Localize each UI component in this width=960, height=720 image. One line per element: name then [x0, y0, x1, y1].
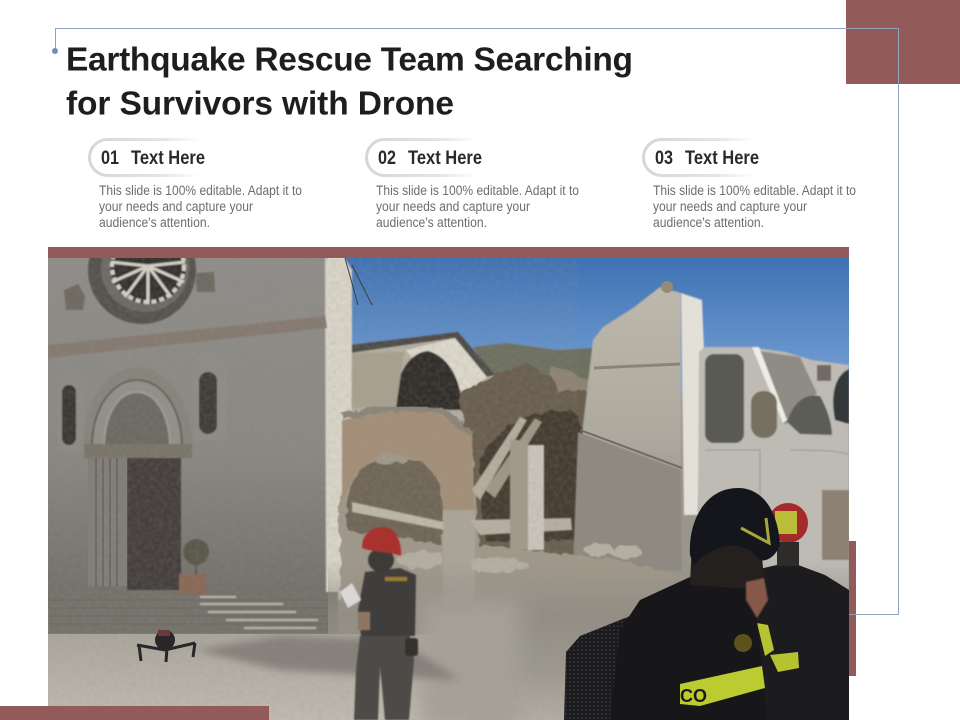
jacket — [610, 577, 767, 720]
shoulder badge — [734, 634, 752, 652]
rear body — [755, 562, 849, 720]
helmet yellow patch — [775, 511, 797, 534]
rose window — [87, 258, 197, 324]
jacket lettering: CO — [680, 686, 707, 706]
tablet — [340, 583, 361, 608]
house with roof behind the ruins — [350, 332, 500, 420]
item 01 — [90, 140, 302, 230]
right niche — [198, 372, 218, 434]
photo scene: rescue team flying a drone at earthquake ruins — [48, 216, 849, 720]
tower face — [582, 286, 682, 469]
portal columns — [88, 458, 127, 586]
black helmet — [690, 488, 780, 566]
drone body — [155, 630, 175, 650]
portal door — [127, 458, 181, 590]
arm — [358, 612, 370, 630]
ground — [48, 634, 424, 720]
helmet highlights — [741, 518, 769, 543]
reflective stripes — [757, 623, 774, 656]
broken tower — [573, 281, 704, 570]
radio pouch — [405, 638, 418, 656]
description 01: your needs and capture your — [99, 199, 253, 214]
heading 01: Text Here — [131, 148, 205, 169]
tower white edge — [681, 293, 704, 515]
description 03: This slide is 100% editable. Adapt it to — [653, 183, 856, 198]
description 03: audience's attention. — [653, 215, 764, 230]
stone pillar — [442, 510, 476, 588]
potted plant — [179, 539, 209, 594]
heading 01: 01 — [101, 148, 119, 169]
ground shadow — [195, 636, 460, 680]
description 02: This slide is 100% editable. Adapt it to — [376, 183, 579, 198]
heading 03: 03 — [655, 148, 673, 169]
base tone behind scene — [48, 393, 849, 652]
dust haze over base of ruins — [328, 560, 849, 720]
hand — [746, 578, 768, 618]
description 01 — [99, 183, 302, 230]
decorative block: top right — [846, 0, 960, 84]
description 02 — [376, 183, 579, 230]
corner pier — [325, 258, 352, 600]
item 03 — [644, 140, 856, 230]
white truck cab — [698, 347, 849, 600]
pill outline 02 — [366, 140, 477, 176]
description 02: your needs and capture your — [376, 199, 530, 214]
photo grain texture — [63, 258, 578, 589]
frame dot — [52, 48, 58, 54]
title — [66, 42, 633, 122]
head — [368, 548, 394, 572]
shirt — [358, 568, 416, 636]
heading 02: Text Here — [408, 148, 482, 169]
title: Earthquake Rescue Team Searching — [66, 42, 633, 78]
cornice band — [48, 316, 327, 358]
rear helmet — [768, 503, 808, 543]
beams — [352, 417, 572, 550]
reflective stripe — [680, 666, 765, 706]
collapsed arch, dark brown — [460, 362, 590, 560]
rubble heap — [337, 450, 664, 600]
pill outline 03 — [644, 140, 754, 176]
decorative block: bottom left — [0, 706, 269, 720]
steps — [48, 592, 338, 634]
pill outline 01 — [90, 140, 200, 176]
left niche — [62, 384, 76, 446]
church wall — [48, 258, 328, 608]
rubble and broken arch in centre — [337, 406, 664, 600]
description 02: audience's attention. — [376, 215, 487, 230]
neck — [690, 535, 765, 590]
sky — [345, 258, 849, 393]
mountain — [472, 342, 592, 380]
hole beneath arch — [346, 460, 443, 545]
rear neck — [777, 542, 799, 566]
heading 02: 02 — [378, 148, 396, 169]
band above photo — [48, 247, 849, 258]
trousers — [354, 636, 414, 720]
thin frame outline — [56, 28, 898, 614]
red helmet — [362, 527, 401, 556]
backpack mesh — [564, 612, 660, 720]
rear firefighter — [755, 503, 849, 720]
drone — [137, 630, 195, 662]
shirt logo — [385, 577, 407, 581]
firefighter with tablet — [340, 527, 418, 720]
small carved emblems — [64, 272, 215, 310]
title: for Survivors with Drone — [66, 86, 454, 122]
description 01: audience's attention. — [99, 215, 210, 230]
tan arch — [342, 410, 474, 510]
heading 03: Text Here — [685, 148, 759, 169]
description 01: This slide is 100% editable. Adapt it to — [99, 183, 302, 198]
description 03 — [653, 183, 856, 230]
decorative block: right of photo — [849, 541, 856, 676]
portal arch — [83, 367, 192, 458]
tower lower shade — [573, 432, 681, 570]
arch rubble top — [342, 408, 472, 434]
item 02 — [366, 140, 579, 230]
description 03: your needs and capture your — [653, 199, 807, 214]
rubble stones in the dust — [398, 544, 642, 572]
dust blend — [420, 600, 520, 720]
front firefighter — [564, 488, 780, 720]
church facade — [48, 258, 372, 608]
tower rubble cap — [661, 281, 673, 293]
overhead wires — [345, 258, 372, 305]
